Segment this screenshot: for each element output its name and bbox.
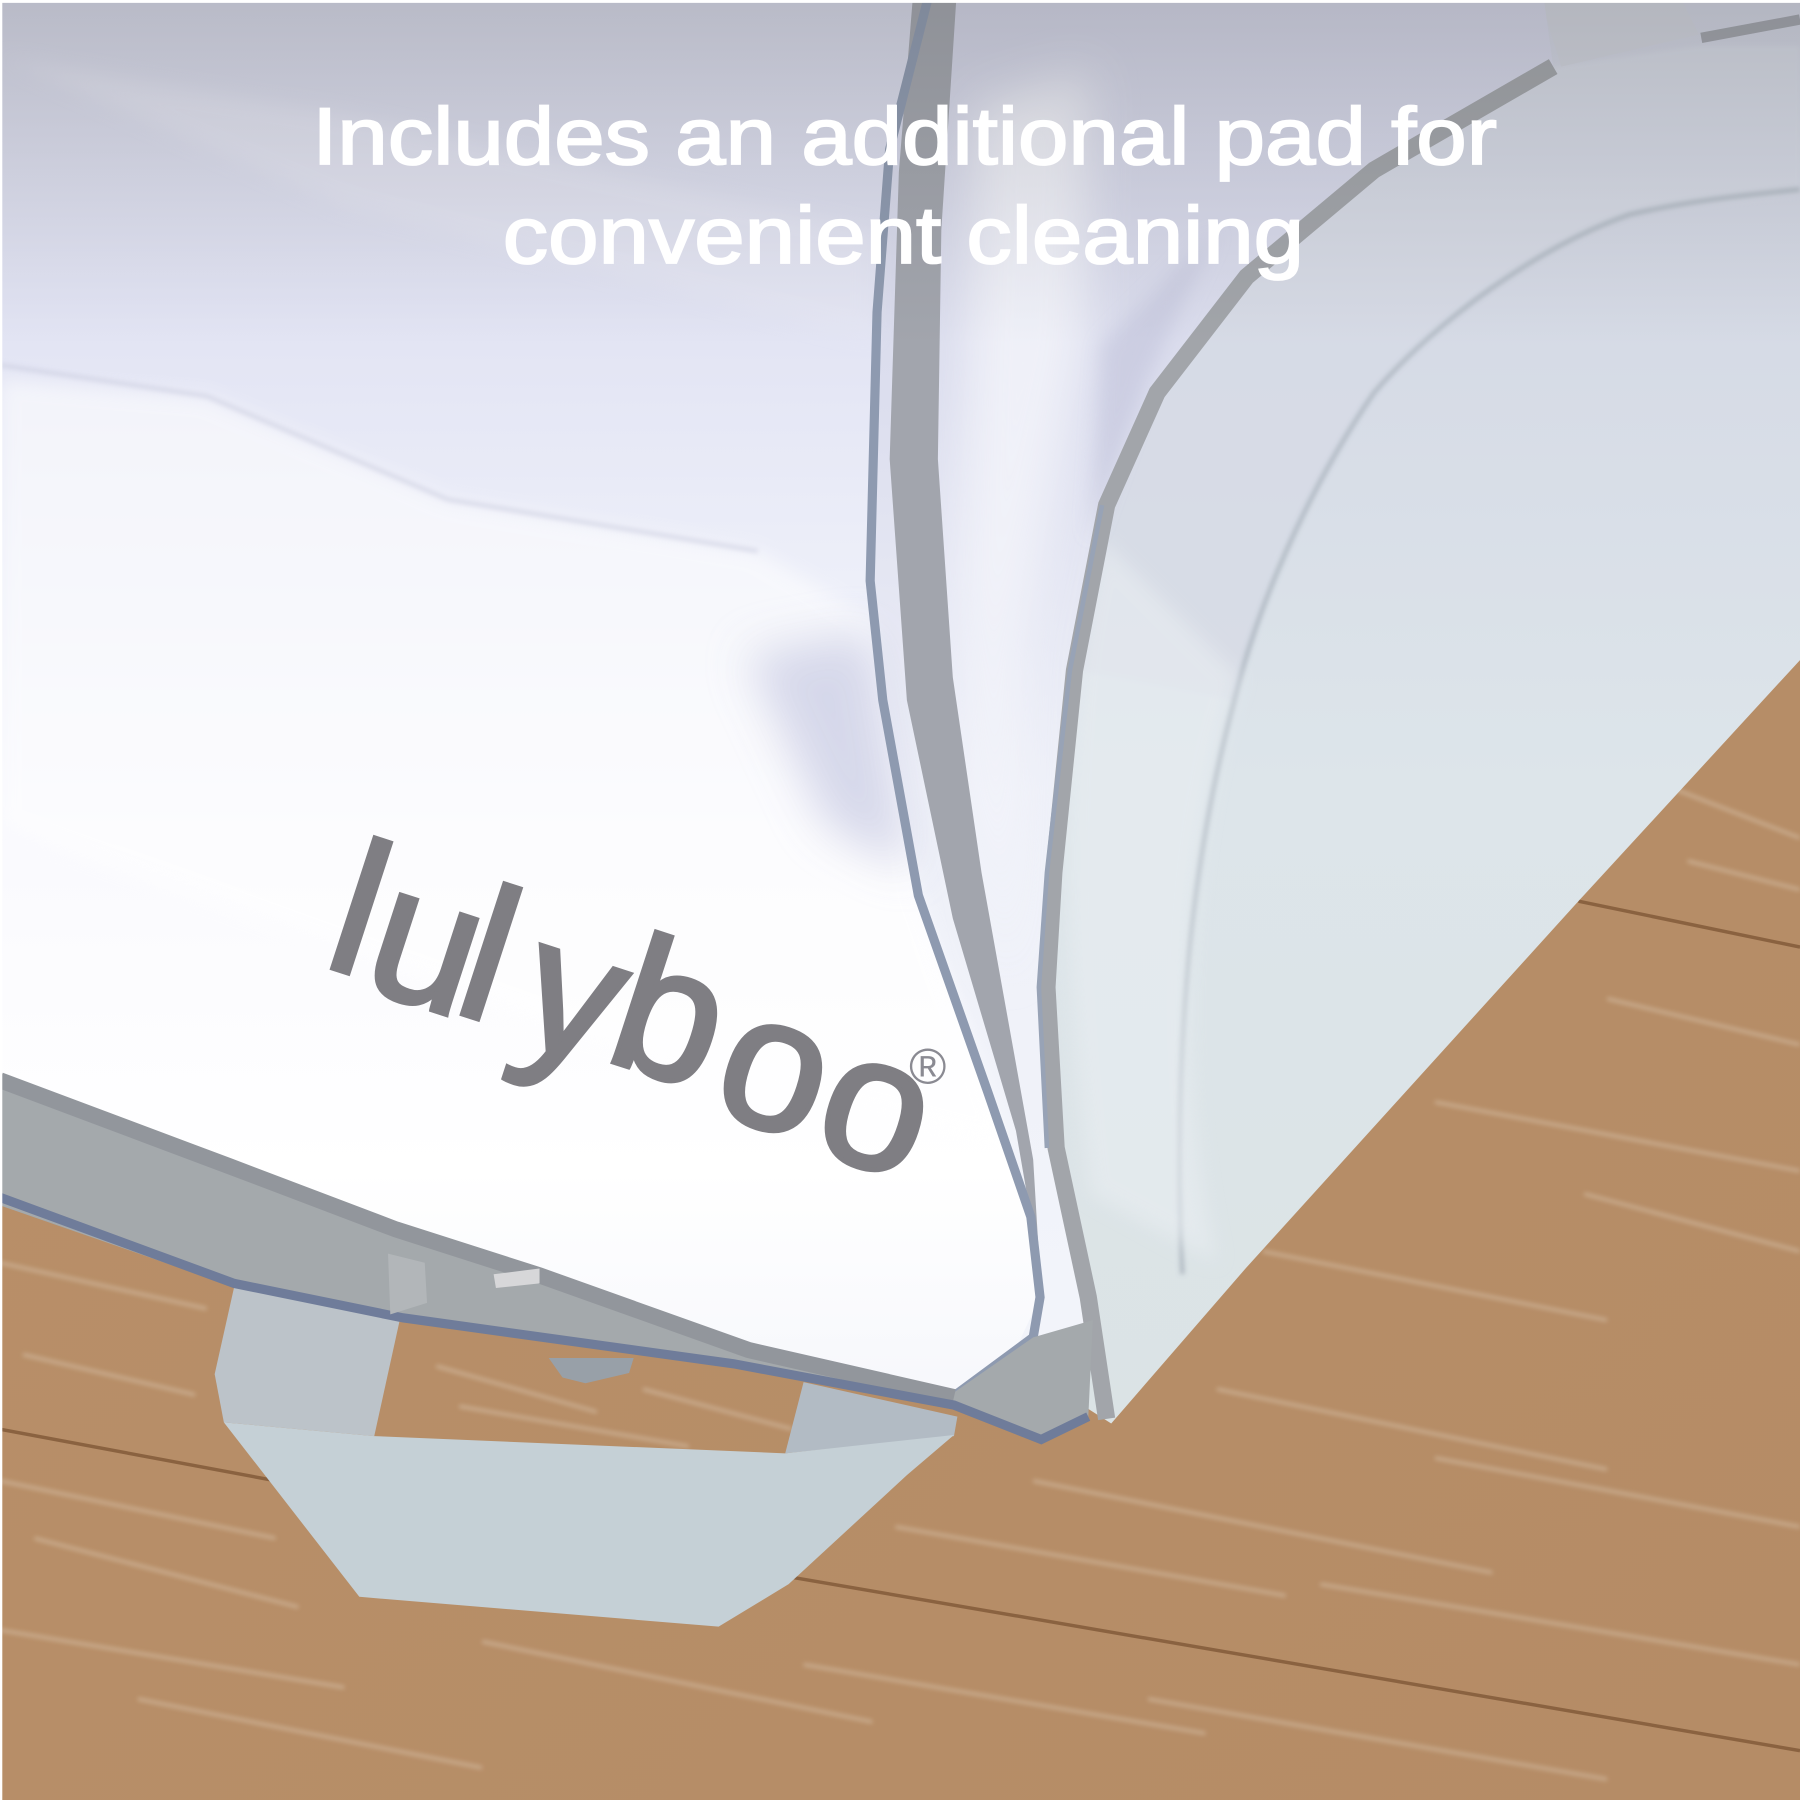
cushion upper gusset bbox=[1074, 46, 1800, 700]
top shading bbox=[0, 0, 1800, 344]
handle strap bbox=[215, 1287, 957, 1627]
title bbox=[312, 92, 1497, 281]
inner pad highlight bbox=[959, 69, 1091, 987]
registered mark: ® bbox=[909, 1038, 946, 1095]
upper zipper tape bbox=[0, 1080, 954, 1397]
handle: right loop bbox=[785, 1382, 957, 1453]
cushion lower panel highlight bbox=[1068, 540, 1240, 1263]
zipper slider bbox=[494, 1268, 540, 1288]
zipper teeth bbox=[870, 0, 1040, 1396]
inner seam bbox=[388, 1254, 427, 1314]
zipper tape bbox=[890, 0, 1040, 1274]
handle: front band bbox=[224, 1422, 954, 1627]
cushion fold line bbox=[1179, 189, 1800, 1274]
title: convenient cleaning bbox=[503, 191, 1304, 281]
long vertical zipper bbox=[870, 0, 1040, 1396]
left white cover bbox=[0, 0, 1040, 1392]
inner pad bbox=[849, 0, 1553, 1366]
cover folds bbox=[0, 379, 1010, 1148]
lulyboo embroidered logo: lulyboo bbox=[308, 803, 961, 1221]
title: Includes an additional pad for bbox=[312, 92, 1497, 182]
zipper pull bbox=[549, 1358, 634, 1383]
inner zipper curve bbox=[1039, 67, 1553, 1419]
bottom zipper strip bbox=[0, 1073, 1093, 1443]
right cushion bbox=[953, 0, 1800, 1423]
handle: left loop bbox=[215, 1287, 399, 1436]
lower zipper teeth bbox=[0, 1197, 1088, 1440]
